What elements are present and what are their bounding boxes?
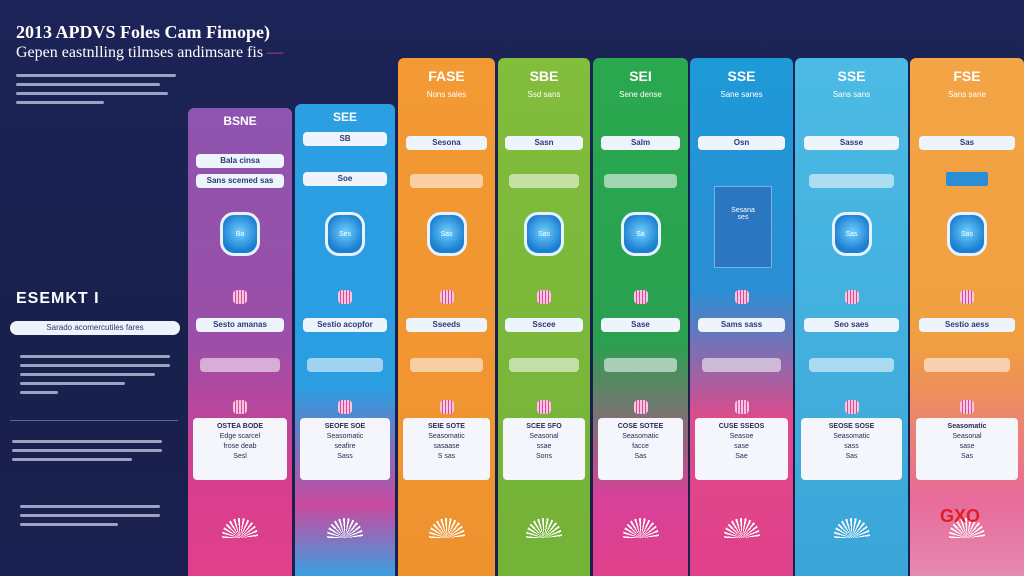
column 6 blue: SSE: [727, 68, 756, 84]
left panel pill: [10, 321, 180, 335]
column 5 green: Sas: [634, 453, 647, 460]
column 7 light blue: Seasomatic: [833, 433, 870, 440]
column 3 orange: SEIE SOTE: [428, 423, 465, 430]
column 3 orange: FASE: [428, 68, 465, 84]
column 8 orange: Sas: [960, 138, 974, 147]
column 2 blue: Sass: [337, 453, 353, 460]
column 6 blue: CUSE SSEOS: [719, 423, 764, 430]
column 3 orange: Nons sales: [427, 90, 466, 99]
column 2 blue: [295, 104, 395, 576]
column 5 green: COSE SOTEE: [618, 423, 663, 430]
column 8 orange: Seasonal: [952, 433, 982, 440]
left panel pill: Sarado acomercutiles fares: [46, 323, 144, 332]
column 8 orange: Seasomatic: [948, 423, 986, 430]
column 8 orange: Sas: [961, 453, 973, 460]
column 4 green: SCEE SFO: [526, 423, 562, 430]
column 1 purple: Sans scemed sas: [207, 176, 273, 185]
column 4 green: SBE: [530, 68, 558, 84]
column 7 light blue: Sasse: [840, 138, 863, 147]
watermark: GXO: [940, 506, 980, 526]
column 4 green: ssae: [537, 443, 551, 450]
column 2 blue: Seasomatic: [327, 433, 363, 440]
column 1 purple: BSNE: [223, 114, 257, 128]
column 4 green: Seasonal: [529, 433, 559, 440]
column 6 blue: sase: [734, 443, 749, 450]
column 1 purple: OSTEA BODE: [217, 423, 263, 430]
column 7 light blue: Seo saes: [834, 320, 869, 329]
column 1 purple: Edge scarcel: [220, 433, 260, 440]
column 7 light blue: SEOSE SOSE: [829, 423, 874, 430]
column 2 blue: Soe: [338, 174, 352, 183]
column 2 blue: Sestio acopfor: [317, 320, 373, 329]
column 1 purple: Sesl: [233, 453, 247, 460]
column 5 green: SEI: [629, 68, 652, 84]
column 6 blue: ses: [738, 214, 748, 221]
column 4 green: Ssd sans: [528, 90, 560, 99]
column 4 green: [498, 58, 590, 576]
column 7 light blue: Sas: [845, 453, 858, 460]
column 4 green: Sscee: [532, 320, 556, 329]
column 4 green: Sas: [538, 231, 550, 238]
column 3 orange: Sesona: [432, 138, 461, 147]
column 5 green: [593, 58, 688, 576]
left bullets: [12, 440, 162, 461]
column 4 green: Sasn: [534, 138, 554, 147]
left text block: [20, 355, 170, 394]
column 8 orange: Sestio aess: [945, 320, 989, 329]
column 5 green: Sa: [636, 231, 645, 238]
column 7 light blue: [795, 58, 908, 576]
column 4 green: Sons: [536, 453, 552, 460]
column 1 purple: [188, 108, 292, 576]
column 3 orange: Seasomatic: [428, 433, 465, 440]
column 8 orange: Sas: [961, 231, 973, 238]
column 6 blue: Sae: [735, 453, 748, 460]
column 2 blue: SEE: [333, 110, 357, 124]
column 8 orange: [910, 58, 1024, 576]
column 3 orange: Sseeds: [432, 320, 461, 329]
column 8 orange: sase: [960, 443, 974, 450]
column 7 light blue: Sans sans: [833, 90, 870, 99]
column 1 purple: Sesto amanas: [213, 320, 267, 329]
title: 2013 APDVS Foles Cam Fimope): [16, 22, 270, 42]
column 6 blue: Sane sanes: [720, 90, 763, 99]
column 6 blue: Osn: [734, 138, 749, 147]
column 8 orange: Sans sane: [948, 90, 986, 99]
column 3 orange: sasaase: [433, 443, 460, 450]
column 1 purple: frose deab: [223, 443, 257, 450]
column 2 blue: seafire: [334, 443, 356, 450]
column 7 light blue: sass: [844, 443, 859, 450]
column 1 purple: Ba: [236, 231, 244, 238]
column 7 light blue: Sas: [845, 231, 858, 238]
column 3 orange: [398, 58, 495, 576]
column 7 light blue: SSE: [837, 68, 866, 84]
column 5 green: Sene dense: [619, 90, 662, 99]
column 3 orange: S sas: [438, 453, 455, 460]
left bottom text: [20, 505, 160, 526]
column 2 blue: SB: [339, 134, 351, 143]
column 6 blue: [690, 58, 793, 576]
column 2 blue: Ses: [339, 231, 351, 238]
column 5 green: Seasomatic: [622, 433, 659, 440]
column 6 blue: Seasoe: [730, 433, 753, 440]
column 1 purple: Bala cinsa: [220, 156, 260, 165]
left panel heading: ESEMKT I: [16, 290, 100, 307]
column 5 green: facce: [632, 443, 649, 450]
column 2 blue: SEOFE SOE: [325, 423, 365, 430]
column 8 orange: FSE: [953, 68, 981, 84]
column 5 green: Salm: [631, 138, 650, 147]
intro text: [16, 74, 176, 104]
column 6 blue: Sams sass: [721, 320, 762, 329]
column 3 orange: Sas: [440, 231, 453, 238]
column 6 blue: Sesana: [731, 207, 755, 214]
subtitle: Gepen eastnlling tilmses andimsare fis —: [16, 44, 283, 61]
column 5 green: Sase: [631, 320, 650, 329]
